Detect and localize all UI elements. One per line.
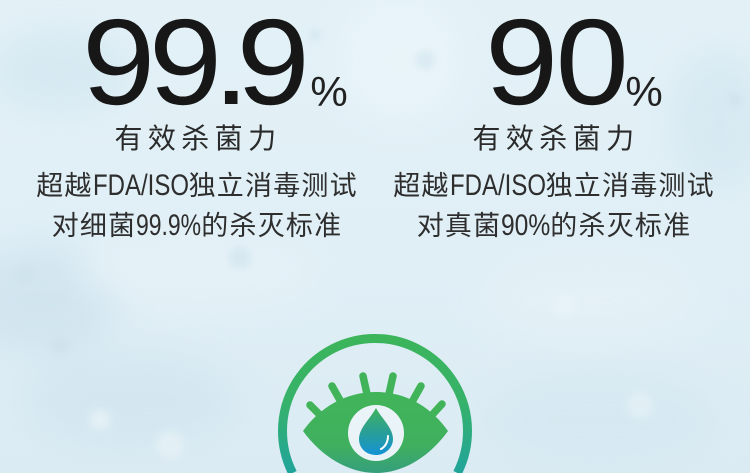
text: left line 1: 超越 独立消毒测试 (36, 171, 358, 201)
text: right line 1: FDA/ISO (450, 169, 546, 202)
text: left line 2: 对细菌 的杀灭标准 (52, 211, 342, 241)
text: right line 1: 超越 独立消毒测试 (393, 171, 715, 201)
text: left line 2: 99.9% (136, 209, 201, 242)
percent sign: right: % (625, 68, 663, 115)
text: right line 2: 对真菌 的杀灭标准 (417, 211, 691, 241)
text: left line 1: FDA/ISO (93, 169, 189, 202)
text: right line 2: 90% (501, 209, 551, 242)
percent sign: left: % (310, 68, 348, 115)
heading: left: 有效杀菌力 (114, 123, 282, 154)
heading: right: 有效杀菌力 (472, 123, 640, 154)
